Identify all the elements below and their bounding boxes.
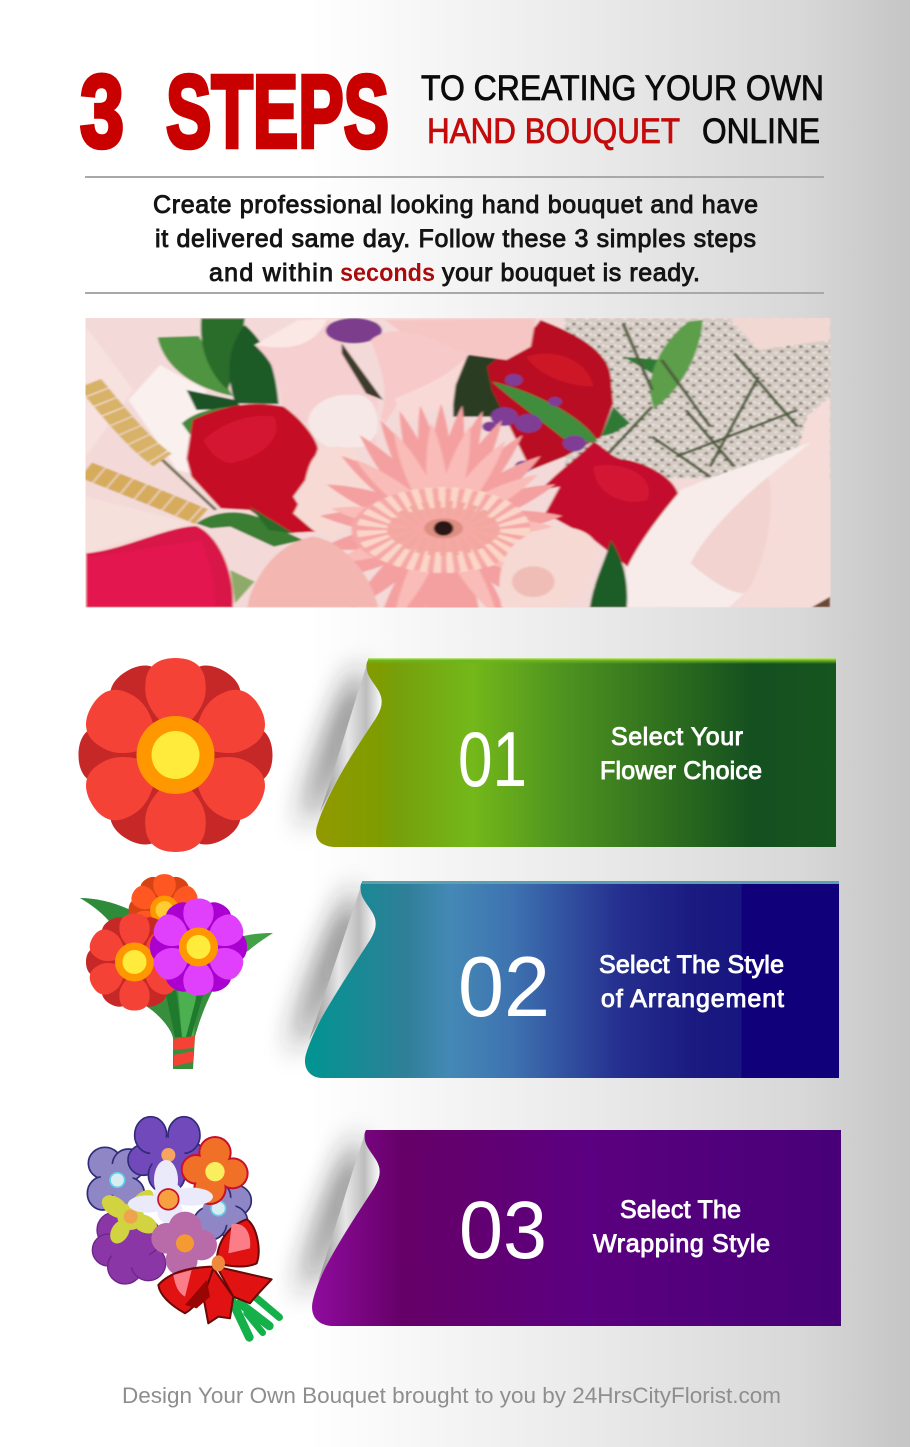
periwinkle flower left	[87, 1147, 144, 1210]
intro paragraph	[153, 191, 758, 287]
intro paragraph: seconds	[340, 259, 435, 287]
white paper wrap right	[625, 442, 812, 607]
icon: red flower	[76, 656, 275, 854]
purple filler dots	[482, 374, 586, 473]
pale rose left of gerbera	[291, 446, 343, 532]
step label: Select The	[620, 1196, 741, 1224]
pale rose top	[254, 319, 378, 443]
leaves top left	[158, 336, 233, 396]
title: hand bouquet online: HAND BOUQUET	[427, 112, 680, 151]
step label: Wrapping Style	[593, 1230, 770, 1258]
step number 03: 03	[459, 1185, 547, 1276]
title: to creating your own: TO CREATING YOUR OWN	[421, 69, 824, 108]
periwinkle flower right	[193, 1183, 251, 1240]
red rose right	[540, 442, 679, 567]
purple flower lower	[92, 1212, 166, 1284]
intro paragraph: and within	[209, 259, 333, 287]
white petal	[308, 395, 377, 448]
long green leaf	[492, 382, 598, 443]
step label	[599, 951, 784, 1013]
carnation top	[385, 318, 536, 360]
step label	[600, 723, 762, 785]
pink rose center top	[371, 331, 470, 423]
intro paragraph: your bouquet is ready.	[442, 259, 700, 287]
green leaf right	[650, 320, 703, 408]
purple filler	[326, 318, 382, 343]
mauve flower	[151, 1212, 217, 1276]
intro paragraph: it delivered same day. Follow these 3 simples steps	[155, 225, 756, 253]
red bow	[158, 1219, 272, 1323]
step label: Select Your	[611, 723, 743, 751]
white star flower	[128, 1160, 213, 1224]
red rose top right	[487, 320, 613, 470]
icon: wrapped bouquet with red bow	[87, 1117, 279, 1337]
ribbon 3	[298, 1130, 841, 1326]
green leaves lower	[196, 512, 303, 547]
pale rose bottom right	[499, 527, 596, 607]
title: hand bouquet online: ONLINE	[702, 112, 820, 151]
step label: Flower Choice	[600, 757, 762, 785]
tulip rose bottom left	[86, 526, 233, 607]
icon: flower bouquet	[80, 873, 273, 1069]
stems	[232, 1294, 279, 1337]
title: 3 STEPS	[80, 54, 389, 169]
step label: Select The Style	[599, 951, 784, 979]
yellow star flower	[98, 1186, 160, 1247]
ribbon 2	[290, 881, 839, 1078]
ribbon 1	[300, 658, 836, 847]
photo: flower bouquet close-up	[86, 318, 830, 608]
red rose left	[187, 404, 318, 533]
intro paragraph: Create professional looking hand bouquet and have	[153, 191, 758, 219]
step 3	[87, 1117, 841, 1337]
dark core	[453, 353, 502, 417]
step label: of Arrangement	[601, 985, 784, 1013]
carnation bottom	[247, 537, 378, 607]
step 1	[76, 656, 836, 854]
title	[80, 54, 824, 169]
step 2	[80, 873, 839, 1078]
footer credit: Design Your Own Bouquet brought to you by 24HrsCityFlorist.com	[122, 1383, 781, 1408]
orange flower	[181, 1136, 249, 1205]
step number 02: 02	[458, 940, 550, 1035]
wheat stalks	[90, 383, 162, 460]
title: 3 STEPS: 3	[80, 54, 124, 169]
violet flower top	[128, 1117, 207, 1193]
gerbera petals	[319, 403, 563, 650]
step label	[593, 1196, 770, 1258]
step number 01: 01	[458, 715, 527, 803]
title: 3 STEPS: STEPS	[166, 54, 389, 169]
